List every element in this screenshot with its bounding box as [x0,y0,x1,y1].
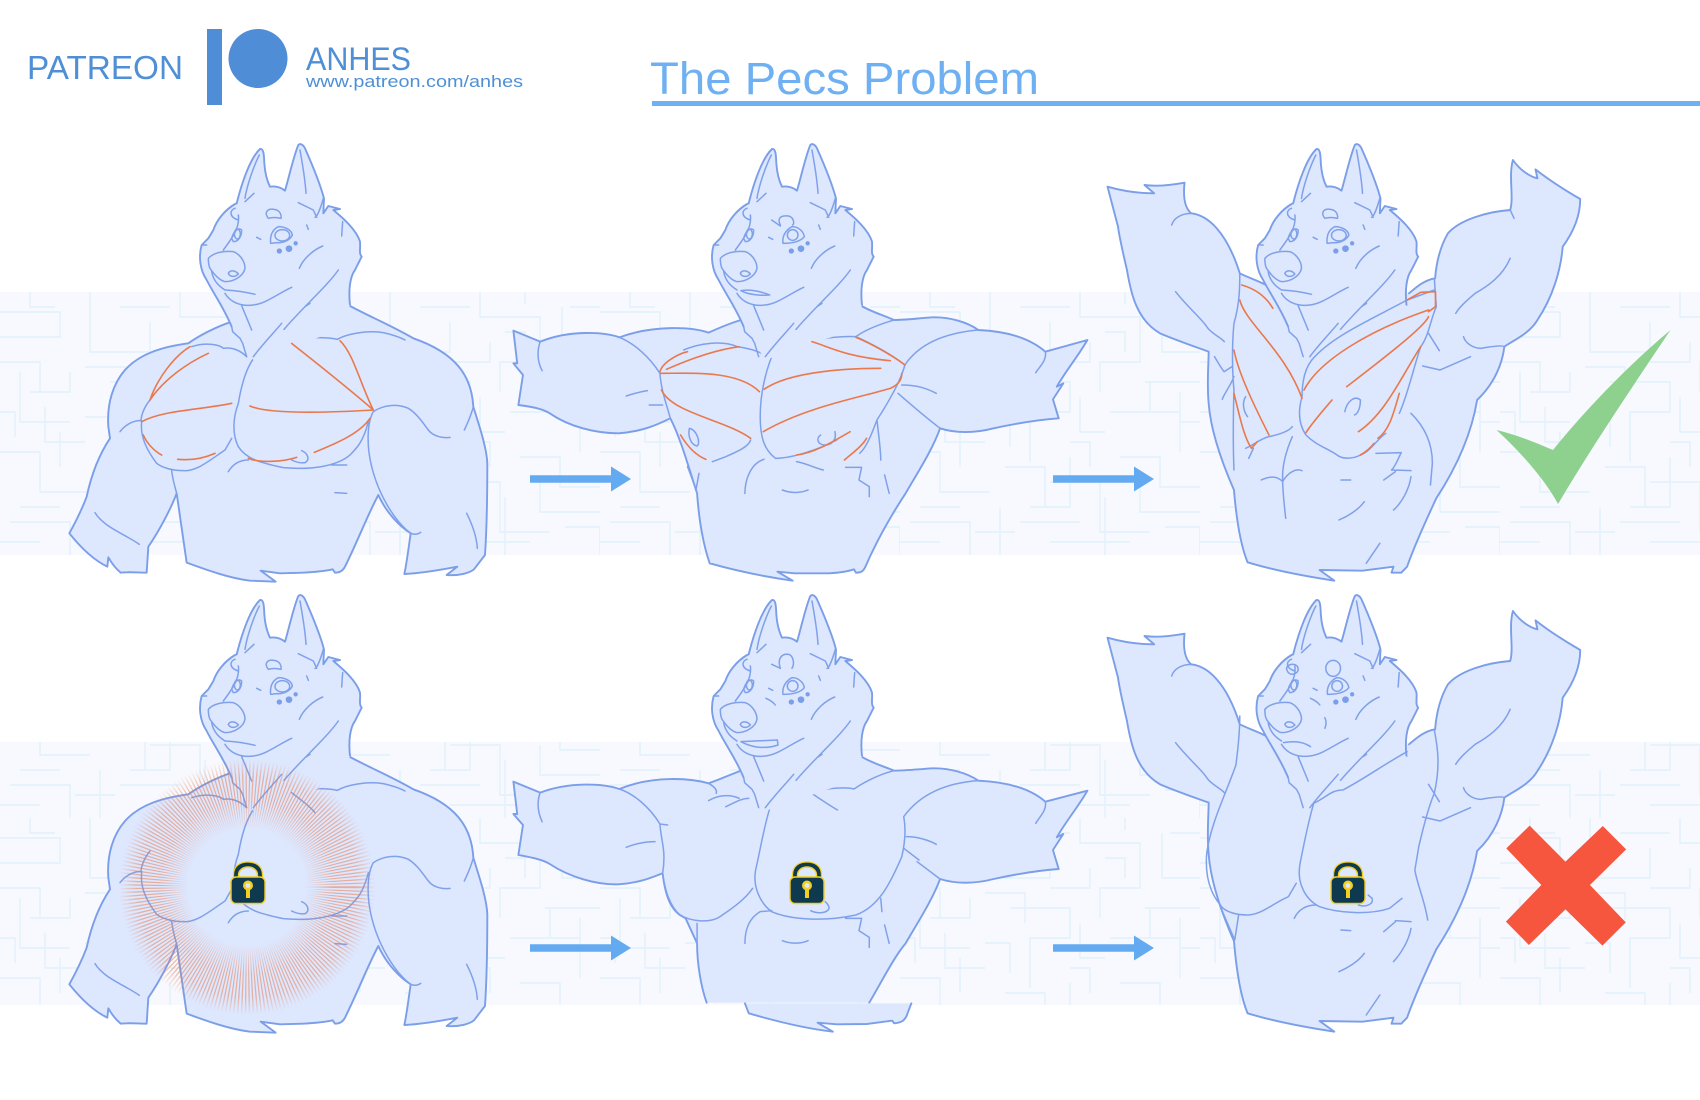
patreon wordmark: PATREON [27,49,183,86]
head [200,144,362,360]
icon: green check mark [1497,330,1670,504]
icon: red cross [1506,826,1626,946]
head [712,595,874,811]
logo circle [228,29,288,88]
figure: bottom right, arms raised locked [1108,595,1580,1032]
displaced lower torso slice [745,1003,911,1032]
arrow: top row second [1053,466,1154,492]
torso and arms [513,306,1087,581]
torso [69,306,487,582]
icon: padlock [231,862,265,904]
pec top crease [292,793,315,813]
title underline [652,101,1700,106]
head [712,144,874,360]
muscle contour lines [1172,210,1514,563]
head [200,595,362,811]
figure: top middle, arms out with pec lines [513,144,1087,581]
figure: top left, arms down with pec lines [69,144,487,582]
bottom band: circuit pattern [0,742,1700,1005]
orange pec fibres [660,337,905,460]
logo bar [207,29,222,105]
orange pec fibres [142,341,373,461]
arrow: bottom row second [1053,936,1154,960]
icon: padlock [1331,862,1365,904]
top band: circuit pattern [0,292,1700,555]
head [1256,144,1418,360]
orange radial burst [155,795,339,979]
figure: bottom left, arms down with radiating pain [69,595,487,1033]
figure: bottom middle, arms out locked [513,595,1087,1032]
icon: padlock [790,862,824,904]
author url: www.patreon.com/anhes [305,72,523,91]
patreon logo block [27,29,523,105]
orange pec fibres [1234,285,1435,455]
muscle contour lines [1172,664,1510,1015]
torso and arms [1108,611,1580,1032]
torso and arms [1108,160,1580,581]
arrow: bottom row first [530,936,631,960]
figure: top right, arms raised with pec lines [1108,144,1580,581]
torso [69,757,487,1033]
head [1256,595,1418,811]
title: The Pecs Problem [650,53,1039,104]
author name: ANHES [306,41,411,77]
torso and arms [513,757,1087,1032]
arrow: top row first [530,466,631,492]
